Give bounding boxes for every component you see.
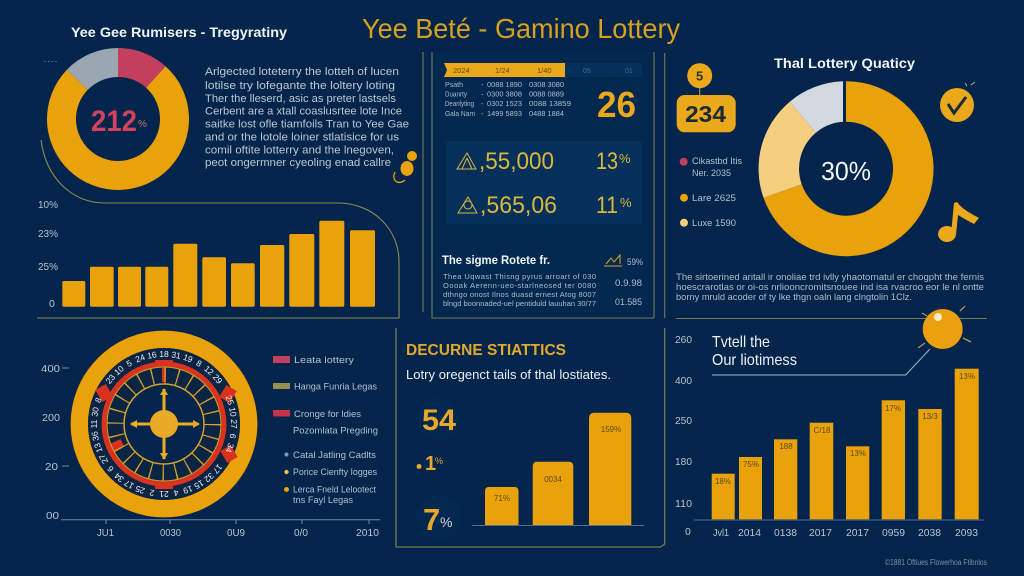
- bars: C/18: [814, 426, 831, 435]
- legend: wheel: Pozomlata Pregding: [293, 426, 378, 436]
- table header band: 1/24: [495, 66, 510, 75]
- title: Yee Beté - Gamino Lottery: [362, 13, 680, 44]
- legend: right donut: Cikastbd Itis: [692, 156, 742, 167]
- bars: 13/3: [922, 412, 938, 421]
- stats box: 11: [596, 192, 618, 219]
- text block: lottery description: Arlgected loteterry the lotteh of lucen: [205, 66, 399, 78]
- axis labels: 00: [46, 510, 59, 522]
- data table: [445, 80, 571, 118]
- bar chart: top left: 25%: [38, 261, 58, 273]
- icon: sun: [918, 306, 971, 349]
- axis labels: JU1: [97, 527, 114, 539]
- data table: 0088 1890: [487, 80, 522, 89]
- stats box: %: [619, 151, 631, 166]
- wheel numbers: 23: [104, 372, 117, 386]
- axis labels: [41, 363, 379, 539]
- axis labels: Jvl1: [713, 527, 729, 539]
- data table: -: [481, 99, 484, 108]
- subheading: Lotry oregenct tails of thal lostiates.: [406, 368, 611, 382]
- wheel numbers: 4: [173, 488, 179, 498]
- heading: bottom right: Tvtell the: [712, 334, 770, 351]
- axis labels: 0030: [160, 527, 181, 539]
- sub heading: The sigme Rotete fr.: [442, 253, 550, 267]
- panel: roulette wheel: [41, 339, 380, 539]
- panel: top left donut and text: [44, 24, 417, 190]
- data table: 1499 5893: [487, 109, 522, 118]
- donut chart: left: %: [138, 119, 147, 130]
- text block: lottery description: saitke lost ofle tiamfoils Tran to Yee Gae: [205, 118, 409, 130]
- axis labels: 180: [675, 456, 692, 468]
- axis labels: 250: [675, 415, 692, 427]
- data table: 0088 13859: [529, 99, 571, 108]
- icon: music note: [938, 202, 979, 242]
- stat numbers: [416, 398, 461, 539]
- stat numbers: 7: [423, 502, 440, 537]
- small table text: Thea Uqwast Thisng pyrus arroart of 030: [443, 272, 596, 281]
- icon: charm: [394, 151, 417, 182]
- small table text: Oooak Aerenn-ueo-starlneosed ter 0080: [443, 281, 596, 290]
- axis labels: 0138: [774, 527, 797, 539]
- wheel numbers: [89, 349, 239, 499]
- heading: quality: Thal Lottery Quaticy: [774, 55, 915, 71]
- wheel numbers: 34: [112, 471, 126, 484]
- bars: 17%: [885, 404, 901, 413]
- wheel numbers: 24: [134, 352, 146, 365]
- badge: 5 and 234: [677, 63, 736, 132]
- text block: right description: hoescrarotlas or oi-os nrliooncromitsnouee ind isa rvacroo eor le nl ontte: [676, 282, 984, 293]
- wheel numbers: 12: [202, 364, 216, 377]
- legend: wheel: Catal Jatling Cadlts: [293, 450, 376, 461]
- legend: wheel: Hanga Funria Legas: [294, 382, 377, 392]
- icon: mini chart: [604, 255, 622, 266]
- wheel numbers: 8: [93, 396, 104, 404]
- bars: 188: [779, 442, 793, 451]
- wheel numbers: 6: [105, 464, 116, 474]
- wheel cross and hub: [130, 388, 200, 460]
- table header band: 01: [625, 68, 633, 75]
- bar chart: center: [472, 413, 644, 526]
- wheel numbers: 19: [182, 483, 194, 496]
- bars: 18%: [715, 477, 731, 486]
- stat numbers: %: [440, 514, 452, 530]
- small table text: 0.9.98: [615, 278, 642, 288]
- axis labels: 2017: [809, 527, 832, 539]
- data table: Deanlyting: [445, 99, 474, 108]
- stats box: ,55,000: [479, 148, 554, 175]
- panel: decurne statistics: [396, 328, 665, 547]
- stat numbers: 1: [425, 453, 436, 475]
- footer credit: ©1881 Oftiues Flowerhoa Ftibnlos: [885, 558, 987, 567]
- table header band: 2024: [453, 66, 470, 75]
- text block: lottery description: Ther the lleserd, asic as preter lastsels: [205, 93, 396, 105]
- wheel numbers: 25: [134, 483, 146, 496]
- legend: wheel: Cronge for ldies: [294, 409, 361, 420]
- data table: -: [481, 90, 484, 98]
- stat numbers: %: [435, 456, 443, 466]
- badge: 5 and 234: 5: [696, 68, 703, 84]
- wheel numbers: 10: [112, 363, 126, 377]
- donut chart: right: [759, 81, 934, 256]
- badge: 5 and 234: 234: [685, 101, 726, 127]
- wheel numbers: 31: [171, 349, 182, 361]
- bars: [694, 369, 984, 520]
- text block: lottery description: [205, 66, 409, 169]
- callout line: [712, 349, 930, 375]
- heading: top left: Yee Gee Rumisers - Tregyratiny: [71, 24, 287, 40]
- bar chart: top left: 0: [49, 298, 55, 310]
- wheel numbers: 13: [92, 442, 105, 454]
- legend: right donut: Luxe 1590: [692, 218, 736, 229]
- text block: right description: [676, 272, 984, 303]
- axis labels: 0959: [882, 527, 905, 539]
- bars: 13%: [850, 449, 866, 458]
- data table: -: [481, 109, 484, 118]
- text block: lottery description: lotilse try lofegante the loltery loting: [205, 80, 395, 92]
- wheel numbers: 34: [223, 442, 236, 454]
- axis labels: 0U9: [227, 527, 245, 539]
- divider: right: [676, 318, 987, 320]
- axis labels: 2093: [955, 527, 978, 539]
- legend: wheel: tns Fayl Legas: [293, 495, 353, 506]
- bars: 13%: [959, 372, 975, 381]
- wheel numbers: 25: [223, 394, 236, 406]
- axis labels: 20: [45, 461, 58, 473]
- icon: check badge: [940, 82, 975, 122]
- text block: lottery description: comil oftite lotterry and the lnegoven,: [205, 144, 394, 156]
- donut chart: left: [44, 48, 189, 190]
- axis labels: 110: [675, 498, 692, 510]
- axis labels: 2038: [918, 527, 941, 539]
- panel: top right donut: [665, 53, 984, 318]
- axis labels: 400: [675, 375, 692, 387]
- heading: decurne: DECURNE STIATTICS: [406, 342, 566, 359]
- legend: wheel: Porice Cienfty Iogges: [293, 467, 377, 478]
- bars: 75%: [743, 460, 759, 469]
- axis labels: 0/0: [294, 527, 308, 539]
- wheel red pockets: [95, 360, 238, 489]
- bar chart: top left: [38, 199, 375, 310]
- legend: wheel: Lerca Fneld Lelootect: [293, 484, 376, 496]
- table header band: [444, 63, 642, 77]
- legend: right donut: Lare 2625: [692, 193, 736, 204]
- legend: wheel: Leata lottery: [294, 355, 354, 366]
- heading: bottom right: Our liotimess: [712, 352, 797, 369]
- small table text: 01.585: [615, 297, 642, 307]
- data table: Psath: [445, 80, 463, 89]
- wheel numbers: 21: [159, 489, 169, 499]
- wheel numbers: 15: [192, 478, 206, 491]
- icon: wheel: [79, 339, 249, 509]
- stats box: %: [620, 195, 632, 210]
- text block: lottery description: peot ongermner cyeoling enad callre: [205, 157, 391, 169]
- wheel numbers: 5: [124, 358, 134, 369]
- data table: 0088 0889: [529, 90, 564, 98]
- icon: triangle 1: [457, 153, 476, 169]
- wheel numbers: 8: [194, 358, 204, 369]
- panel: center statistics: [423, 52, 654, 318]
- wheel numbers: 6: [228, 433, 238, 440]
- wheel numbers: 32: [202, 471, 216, 485]
- donut chart: right: 30%: [821, 156, 871, 186]
- table header band: 05: [583, 68, 591, 75]
- wheel numbers: 36: [89, 430, 101, 442]
- wheel numbers: 17: [122, 478, 136, 491]
- small table text: dthngo onost Ilnos duasd ernest Atog 8007: [443, 290, 596, 299]
- data table: 0300 3808: [487, 90, 522, 98]
- wheel numbers: 17: [211, 462, 224, 476]
- axis labels: 200: [42, 412, 60, 424]
- wheel numbers: 16: [146, 349, 158, 361]
- data table: 0308 3080: [529, 80, 564, 89]
- text block: right description: The sirtoerined aritall ir onoliae trd ivlly yhaotornatul er chogpht the fernis: [676, 272, 984, 283]
- data table: Gala Nam: [445, 109, 475, 118]
- data table: Duanrty: [445, 90, 467, 98]
- stat numbers: 54: [422, 404, 456, 437]
- frame line: top left: [37, 140, 399, 318]
- donut chart: left: 212: [91, 105, 137, 138]
- bar chart: center: 159%: [601, 425, 621, 434]
- wheel numbers: 10: [227, 406, 239, 418]
- bar chart: top left: 23%: [38, 228, 58, 240]
- bar chart: center: 0034: [544, 475, 562, 484]
- axis labels: 2010: [356, 527, 379, 539]
- legend: wheel: [273, 355, 378, 506]
- wheel numbers: 27: [97, 452, 110, 466]
- stats box: 13: [596, 148, 618, 175]
- stats box: [446, 141, 642, 224]
- axis labels: 0: [685, 526, 691, 538]
- wheel numbers: 19: [182, 352, 194, 365]
- panel: bottom right bar chart: [675, 306, 987, 567]
- wheel numbers: 2: [148, 488, 155, 498]
- wheel numbers: 30: [89, 406, 101, 417]
- axis labels: 400: [41, 363, 60, 375]
- axis labels: [675, 334, 978, 539]
- data table: 0488 1884: [529, 109, 564, 118]
- wheel numbers: 27: [229, 419, 239, 429]
- data table: -: [481, 80, 484, 89]
- legend: right donut: [680, 156, 742, 229]
- text block: right description: borny mruld acoder of ty lke thgn oaln lang clngtolin 1Clz.: [676, 292, 912, 303]
- donut chart: left: - - - -: [44, 59, 57, 65]
- small table text: blngd boonnaded-uel pentiduld lauuhan 30/77: [443, 299, 596, 308]
- wheel numbers: 11: [89, 419, 99, 428]
- big number 26: 26: [597, 84, 636, 125]
- data table: 0302 1523: [487, 99, 522, 108]
- small table text: 59%: [627, 257, 643, 267]
- text block: lottery description: and or the lotole loiner stlatisice for us: [205, 132, 400, 144]
- icon: triangle 2: [458, 197, 477, 213]
- small table text: [443, 257, 643, 308]
- legend: right donut: Ner. 2035: [692, 168, 731, 179]
- wheel numbers: 29: [211, 372, 225, 386]
- axis labels: 2014: [738, 527, 761, 539]
- text block: lottery description: Cerbent are a xtall coaslusrtee lote Ince: [205, 106, 402, 118]
- heading: bottom right: [712, 334, 797, 369]
- bar chart: center: 71%: [494, 494, 510, 503]
- axis labels: 2017: [846, 527, 869, 539]
- stats box: ,565,06: [480, 192, 557, 219]
- wheel numbers: 18: [159, 349, 169, 359]
- bar chart: top left: 10%: [38, 199, 58, 211]
- axis labels: 260: [675, 334, 692, 346]
- table header band: 1/40: [537, 66, 552, 75]
